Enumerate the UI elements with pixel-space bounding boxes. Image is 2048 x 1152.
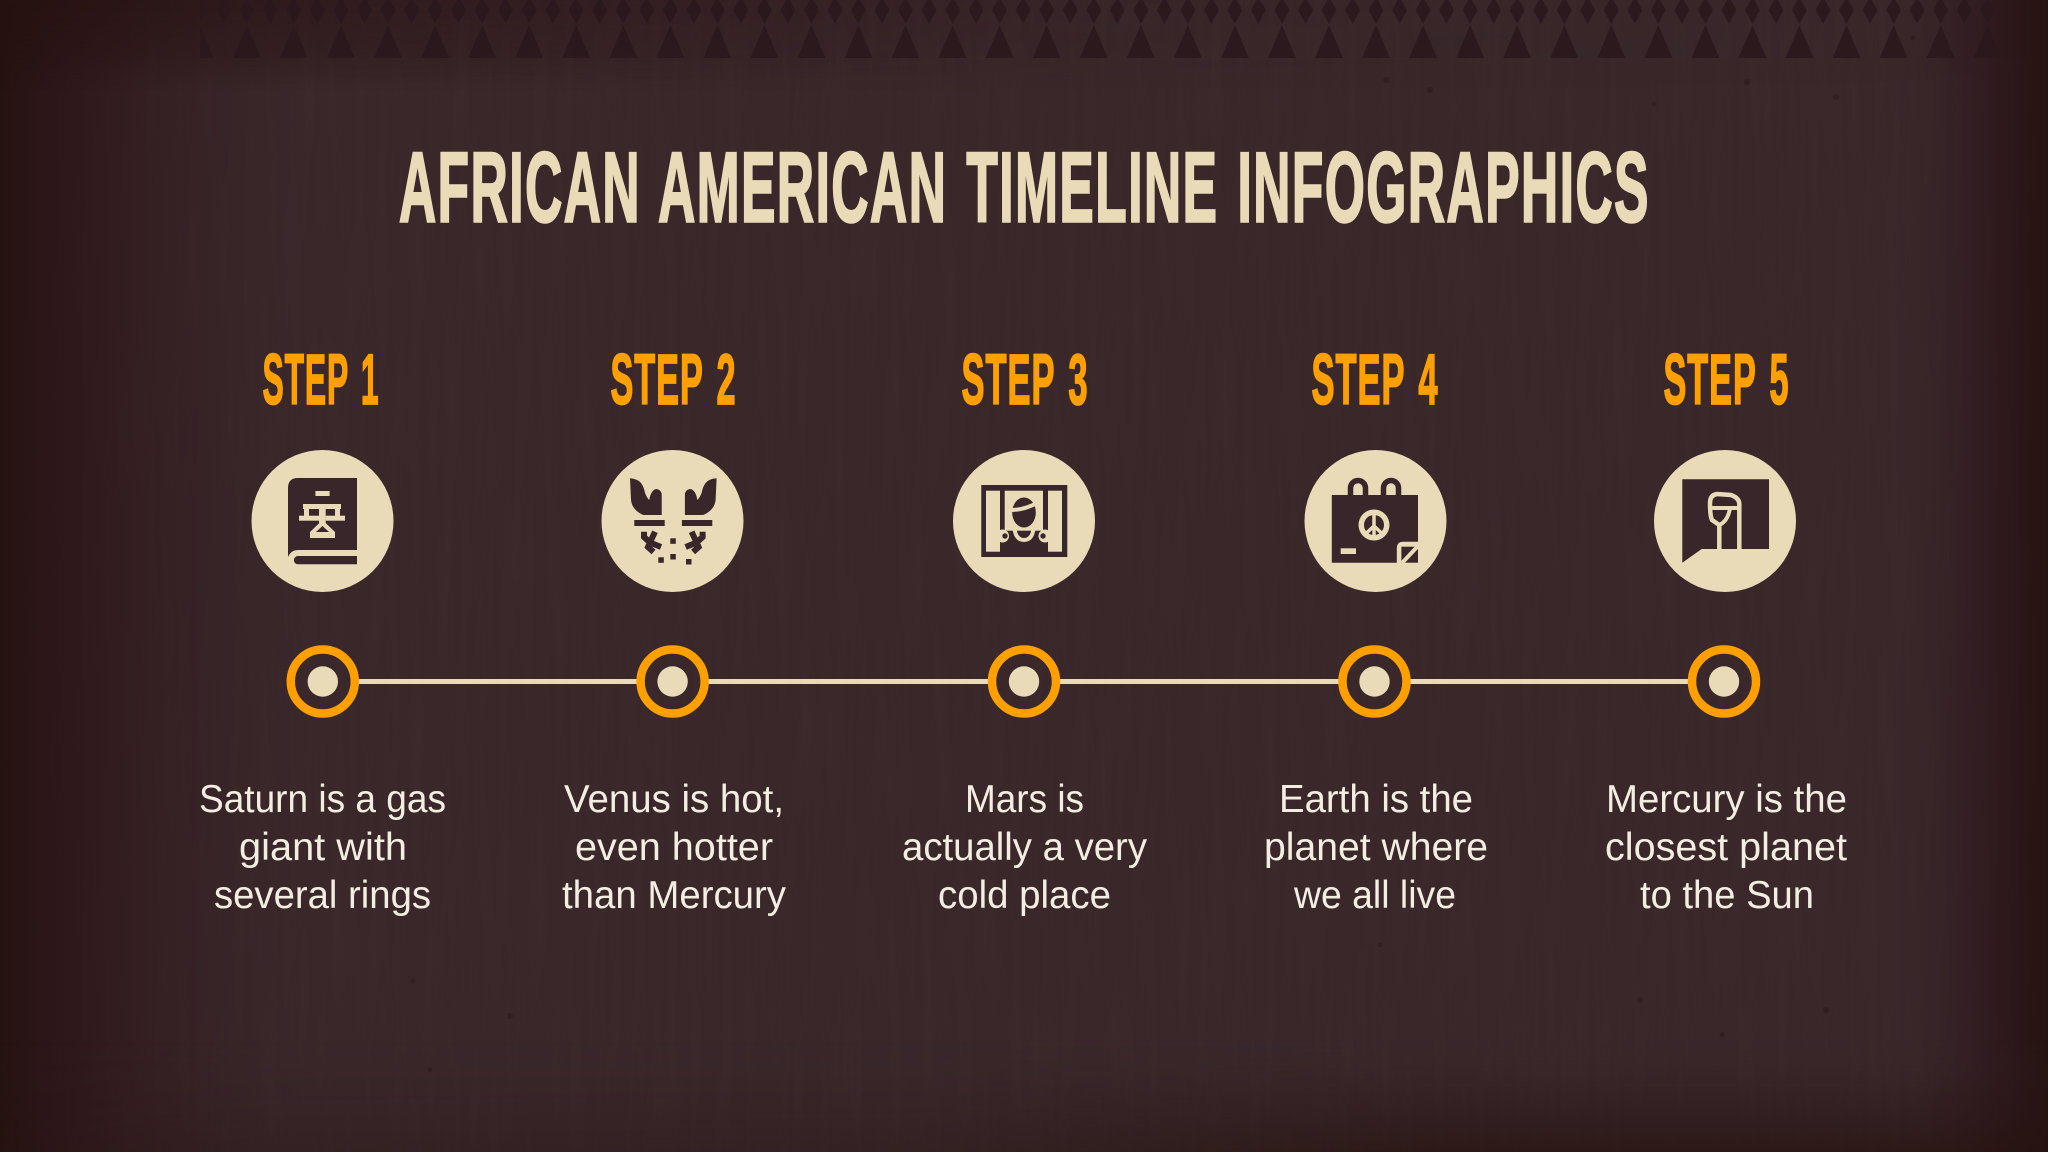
step 3 description — [902, 778, 1147, 917]
panel: step 2 — [562, 341, 786, 917]
panel: step 4 — [1264, 341, 1488, 917]
icon: law book with scales — [252, 450, 394, 592]
step 3 description: Mars is — [965, 778, 1084, 821]
panel: step 3 — [902, 341, 1147, 917]
step 5 description — [1605, 778, 1847, 917]
panel: step 1: STEP 1 — [262, 341, 380, 420]
icon: person behind bars — [953, 450, 1095, 592]
panel: step 3: STEP 3 — [962, 341, 1088, 420]
step 5 description: closest planet — [1605, 826, 1847, 869]
step 1 description: giant with — [239, 826, 407, 869]
icon: hands breaking chains — [602, 450, 744, 592]
panel: step 4: STEP 4 — [1312, 341, 1438, 420]
step 5 description: to the Sun — [1640, 874, 1814, 917]
panel: step 2: STEP 2 — [610, 341, 736, 420]
decorative top pattern band — [200, 0, 2000, 59]
step 2 description: even hotter — [575, 826, 773, 869]
panel: step 1 — [199, 341, 446, 917]
icon: speech bubble with person — [1654, 450, 1796, 592]
step 4 description: we all live — [1293, 874, 1456, 917]
step 1 description — [199, 778, 446, 917]
step 4 description — [1264, 778, 1488, 917]
step 1 description: Saturn is a gas — [199, 778, 446, 821]
step 4 description: Earth is the — [1279, 778, 1473, 821]
step 3 description: cold place — [938, 874, 1111, 917]
step 1 description: several rings — [214, 874, 431, 917]
step 2 description: Venus is hot, — [564, 778, 784, 821]
panel: step 5 — [1605, 341, 1847, 917]
panel: step 5: STEP 5 — [1664, 341, 1790, 420]
icon: protest sign with peace symbol — [1304, 450, 1446, 592]
step 4 description: planet where — [1264, 826, 1488, 869]
step 2 description: than Mercury — [562, 874, 786, 917]
step 3 description: actually a very — [902, 826, 1147, 869]
step 5 description: Mercury is the — [1606, 778, 1847, 821]
step 2 description — [562, 778, 786, 917]
timeline: line with five ring markers — [291, 650, 1756, 714]
